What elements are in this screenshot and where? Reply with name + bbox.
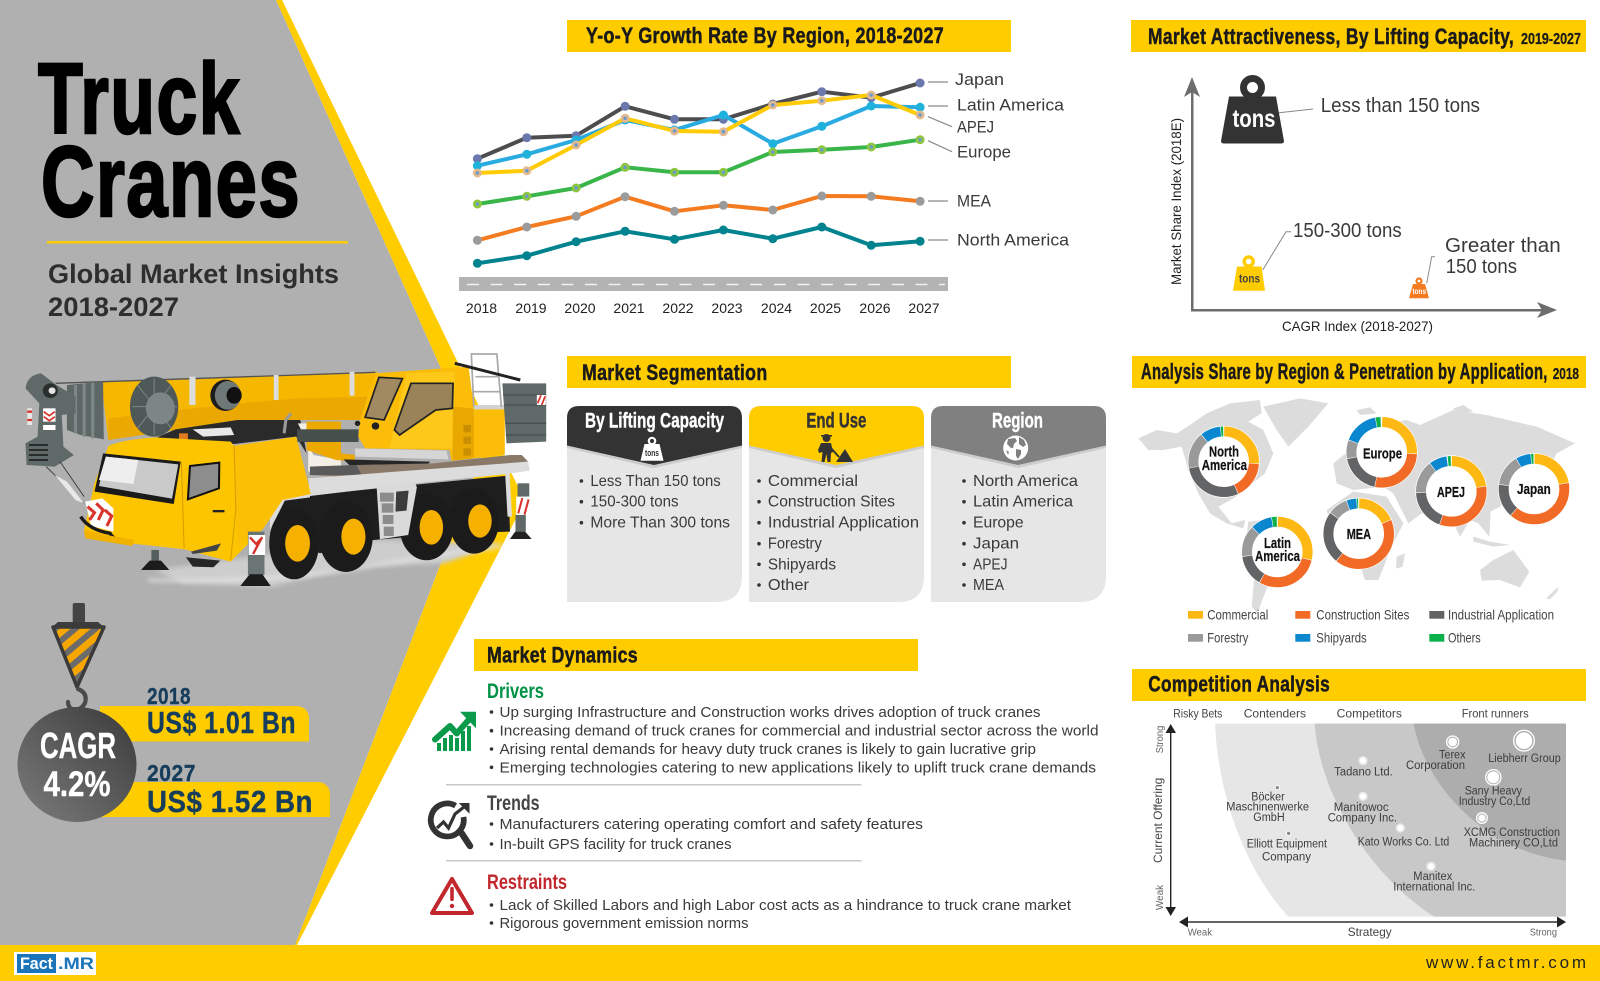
panel: end use (749, 406, 924, 602)
icon: crane hook (52, 603, 104, 710)
x-axis label: CAGR Index (2018-2027) (1282, 318, 1433, 334)
series: North America (473, 222, 925, 268)
turntable and superstructure (307, 422, 355, 462)
text: 2018 market value: 2018 (147, 683, 191, 709)
axis labels: Weak (1154, 884, 1166, 910)
icon: weight: tons (645, 448, 659, 458)
icon: weight (640, 438, 664, 461)
counterweight (502, 383, 546, 443)
series labels: MEA (957, 192, 992, 211)
callout: CAGR circle: 4.2% (44, 765, 110, 804)
icon: large dark weight: tons (1232, 105, 1276, 133)
legend: applications: Forestry (1207, 629, 1248, 645)
heading: market dynamics: Market Dynamics (487, 643, 638, 668)
map: world background (1138, 398, 1575, 613)
title (38, 43, 301, 238)
text: drivers: Up surging Infrastructure and Construction works drives adoption of truck cranes (500, 704, 1040, 721)
illustration: yellow mobile crane truck (26, 354, 546, 587)
year labels: 2019 (515, 300, 547, 316)
text: 2027 market value: 2027 (147, 760, 196, 786)
donut: Latin America (1241, 516, 1313, 588)
icon: restraints warning (432, 879, 472, 913)
chart: competition quadrant (1151, 707, 1566, 939)
subtitle (48, 259, 339, 322)
logo: Fact.MR: .MR (58, 954, 94, 973)
series: MEA (473, 192, 925, 245)
donut: APEJ (1415, 455, 1487, 527)
year labels: 2018 (466, 300, 497, 316)
text: drivers: Emerging technologies catering to new applications likely to uplift truck crane demands (500, 759, 1096, 776)
series labels: North America (957, 231, 1070, 250)
donut: Latin America: Latin (1264, 535, 1291, 552)
company labels: Liebherr Group (1488, 753, 1561, 765)
chart: market attractiveness bubble plot (1168, 77, 1561, 334)
yellow diagonal band (276, 0, 525, 945)
label: 150-300 tons: 150-300 tons (1293, 220, 1402, 242)
donut: Japan (1498, 453, 1570, 525)
panel: grey left hexagon (0, 0, 481, 945)
list: end use items (757, 473, 919, 594)
heading: market attractiveness: Market Attractiveness, By Lifting Capacity, (1148, 24, 1514, 49)
list: lifting capacity items: 150-300 tons (590, 494, 679, 511)
heading: Y-o-Y growth: Y-o-Y Growth Rate By Region, 2018-2027 (586, 23, 944, 48)
company labels: GmbH (1253, 812, 1285, 824)
icon: orange weight: tons (1412, 287, 1426, 296)
label: greater than 150 tons: 150 tons (1446, 256, 1517, 278)
icon: yellow weight (1233, 257, 1265, 291)
year labels: 2027 (908, 300, 940, 316)
list: region items: Japan (973, 536, 1019, 553)
subtitle: Global Market Insights (48, 259, 339, 289)
company labels: Sany Heavy (1465, 786, 1522, 798)
zones (1215, 724, 1566, 917)
list: end use items: Other (768, 577, 810, 594)
text: trends: In-built GPS facility for truck cranes (500, 836, 732, 853)
list: end use items: Industrial Application (768, 515, 919, 532)
list: lifting capacity items: More Than 300 tons (590, 515, 730, 532)
series labels: Japan (955, 70, 1004, 89)
axis labels: Strong (1530, 927, 1557, 939)
list: region items: Latin America (973, 494, 1073, 511)
text: restraints: Restraints (487, 871, 567, 894)
year labels: 2026 (859, 300, 891, 316)
deck plate (310, 455, 528, 477)
donut: North America: North (1209, 444, 1239, 461)
truck cab (84, 437, 311, 562)
text: trends: Manufacturers catering operating comfort and safety features (500, 816, 923, 833)
text: drivers (487, 680, 1098, 776)
list: lifting capacity items (580, 473, 730, 532)
axes (1184, 77, 1557, 318)
series: Europe (473, 135, 925, 208)
axis labels: Weak (1188, 927, 1213, 939)
heading: market segmentation (567, 356, 1011, 388)
panel: region (931, 406, 1106, 602)
boom (101, 372, 377, 440)
list: end use items: Shipyards (768, 556, 836, 573)
legend: applications: Shipyards (1316, 629, 1367, 645)
year labels (466, 300, 940, 316)
series labels: APEJ (957, 118, 994, 137)
company labels: Company Inc. (1328, 812, 1397, 824)
donut: North America (1188, 426, 1260, 498)
icon: large dark weight (1221, 78, 1284, 144)
axes (1166, 724, 1566, 928)
boom head (26, 373, 76, 467)
series labels: Latin America (957, 96, 1065, 115)
list: end use items: Forestry (768, 536, 822, 553)
icon: construction worker (818, 434, 853, 462)
donut: MEA (1323, 498, 1395, 570)
logo: Fact.MR (14, 952, 96, 975)
company labels: Industry Co,Ltd (1459, 796, 1530, 808)
year labels: 2022 (662, 300, 694, 316)
legend: applications: Commercial (1207, 606, 1268, 622)
railing (471, 354, 501, 407)
heading: market dynamics (474, 639, 918, 671)
company labels: Company (1262, 851, 1311, 863)
series labels (955, 70, 1070, 250)
donut: MEA: MEA (1347, 526, 1371, 543)
year labels: 2023 (711, 300, 743, 316)
company labels: Elliott Equipment (1247, 839, 1328, 851)
company labels: Machinery CO,Ltd (1469, 838, 1558, 850)
column labels: Risky Bets (1173, 707, 1222, 721)
front warning panel (85, 498, 113, 532)
axis labels: Strategy (1348, 925, 1392, 939)
text: restraints: Lack of Skilled Labors and high Labor cost acts as a hindrance to truck crane market (500, 897, 1072, 914)
list: lifting capacity items: Less Than 150 tons (590, 473, 721, 490)
text: trends (487, 792, 923, 853)
panel: by lifting capacity: By Lifting Capacity (585, 410, 724, 433)
axis labels (1151, 726, 1557, 939)
heading: market segmentation: Market Segmentation (582, 360, 768, 385)
chassis underside (270, 476, 510, 553)
column labels (1173, 707, 1529, 721)
list: region items: North America (973, 473, 1078, 490)
text: 2027 market value: US$ 1.52 Bn (147, 784, 313, 819)
icon: drivers growth chart (435, 712, 476, 751)
heading: analysis share: 2018 (1553, 366, 1579, 383)
list: end use items: Construction Sites (768, 494, 895, 511)
panel: end use: End Use (806, 410, 866, 433)
panel: by lifting capacity (567, 406, 742, 602)
series labels: Europe (957, 143, 1011, 162)
chassis ladder (377, 483, 417, 539)
donut: Japan: Japan (1517, 481, 1551, 498)
year labels: 2024 (761, 300, 792, 316)
company labels: Corporation (1406, 760, 1465, 772)
label: greater than 150 tons: Greater than (1445, 235, 1561, 257)
wheels (269, 488, 499, 579)
icon: trends magnifier (431, 803, 470, 846)
axis labels: Strong (1154, 726, 1166, 753)
year labels: 2020 (564, 300, 596, 316)
company labels: Böcker (1251, 791, 1285, 803)
callout: CAGR circle: CAGR (40, 725, 116, 766)
company labels: Tadano Ltd. (1334, 766, 1393, 778)
company labels: Terex (1439, 750, 1466, 762)
heading: market attractiveness: 2019-2027 (1521, 31, 1581, 48)
list: end use items: Commercial (768, 473, 858, 490)
text: restraints (487, 871, 1072, 932)
year labels: 2021 (613, 300, 645, 316)
title: Cranes (41, 126, 301, 238)
donut: Latin America: America (1255, 548, 1300, 565)
list: region items (962, 473, 1078, 594)
company labels: Maschinenwerke (1226, 802, 1309, 814)
company labels (1226, 750, 1561, 893)
text: 2018 market value: US$ 1.01 Bn (147, 705, 296, 740)
axis labels: Current Offering (1151, 778, 1165, 863)
company labels: Manitowoc (1334, 802, 1389, 814)
list: region items: MEA (973, 577, 1004, 594)
donut: Europe: Europe (1363, 446, 1402, 463)
heading: competition analysis (1132, 669, 1586, 701)
company labels: Manitex (1413, 871, 1453, 883)
big drum (130, 377, 178, 437)
legend: applications: Others (1448, 629, 1481, 645)
road axis (459, 277, 948, 291)
series: Latin America (473, 102, 925, 170)
text: drivers: Arising rental demands for heavy duty truck cranes is likely to gain lucrative grip (500, 741, 1036, 758)
text: 2027 market value (147, 760, 313, 819)
subtitle: 2018-2027 (48, 292, 179, 322)
company labels: International Inc. (1393, 881, 1475, 893)
callout: CAGR circle (18, 707, 136, 822)
series: APEJ (473, 90, 925, 178)
rear outrigger (518, 483, 529, 497)
year labels: 2025 (810, 300, 841, 316)
donut: APEJ: APEJ (1437, 484, 1465, 501)
front outrigger feet (151, 550, 159, 562)
series: Japan (473, 78, 925, 163)
label: 150-300 tons (1263, 220, 1402, 270)
label: greater than 150 tons (1427, 235, 1561, 283)
legend: applications (1188, 606, 1554, 645)
boom end sheaves (67, 382, 104, 439)
y-axis label: Market Share Index (2018E) (1168, 118, 1184, 285)
column labels: Contenders (1244, 707, 1306, 721)
line chart: growth rate by region (459, 70, 1070, 316)
icon: orange weight (1409, 278, 1429, 298)
column labels: Front runners (1462, 707, 1529, 721)
column labels: Competitors (1337, 707, 1402, 721)
donut: Europe (1346, 416, 1418, 488)
text: website: www.factmr.com (1425, 953, 1586, 972)
legend: applications: Construction Sites (1316, 606, 1409, 622)
heading: competition analysis: Competition Analysis (1148, 672, 1330, 697)
icon: yellow weight: tons (1239, 272, 1260, 286)
company labels: Kato Works Co. Ltd (1358, 836, 1449, 848)
footer bar (0, 945, 1600, 981)
title: Truck (38, 43, 241, 155)
list: region items: APEJ (973, 556, 1008, 573)
small drum (210, 380, 241, 411)
list: region items: Europe (973, 515, 1024, 532)
text: 2018 market value (147, 683, 296, 740)
callout: 2027 value band (100, 782, 330, 817)
company labels: XCMG Construction (1464, 827, 1560, 839)
legend: applications: Industrial Application (1448, 606, 1554, 622)
panel: region: Region (992, 410, 1043, 433)
text: drivers: Increasing demand of truck cranes for commercial and industrial sector across the world (500, 723, 1098, 740)
label: less than 150 tons: Less than 150 tons (1321, 95, 1480, 117)
callout: 2018 value band (100, 706, 309, 742)
icon: globe (1003, 436, 1028, 460)
text: drivers: Drivers (487, 680, 544, 703)
chassis silver deck (308, 462, 530, 496)
logo: Fact.MR: Fact (20, 954, 53, 973)
mechanics between boom and cab (155, 420, 307, 453)
text: trends: Trends (487, 792, 540, 815)
title underline (47, 241, 348, 244)
text: restraints: Rigorous government emission norms (500, 915, 748, 932)
donut: North America: America (1202, 457, 1248, 474)
